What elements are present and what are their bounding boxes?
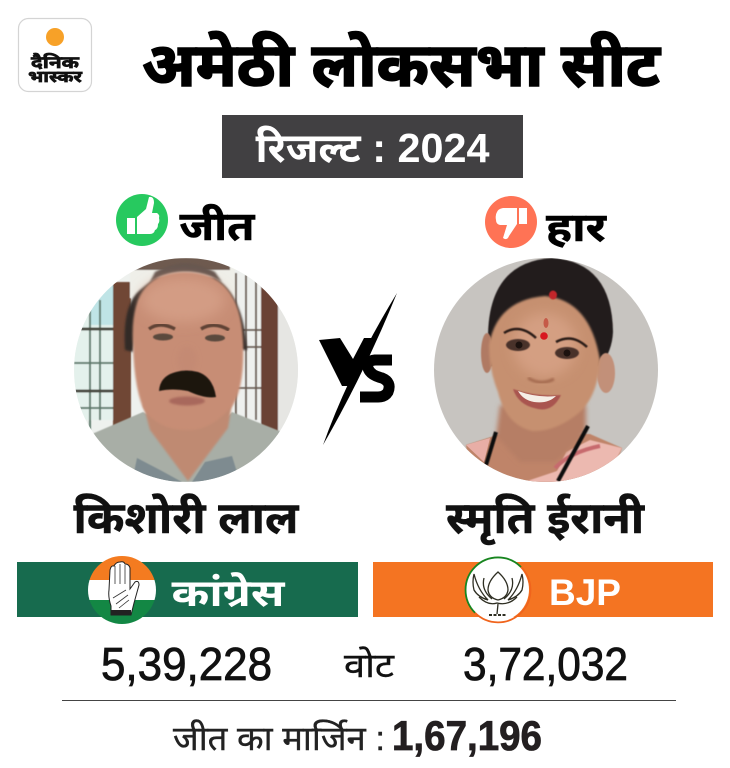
brows and eyes	[149, 325, 229, 330]
neck	[496, 405, 586, 462]
hair	[125, 278, 247, 352]
shirt	[88, 412, 292, 482]
loss label	[485, 196, 608, 250]
result badge	[222, 115, 523, 178]
ears	[481, 333, 493, 373]
hair	[488, 258, 613, 366]
text: congress: कांग्रेस	[172, 571, 286, 615]
face	[133, 272, 243, 430]
icon: versus mark	[319, 293, 397, 445]
candidate name: winner: किशोरी लाल	[74, 493, 300, 543]
party bar: congress	[17, 556, 358, 624]
text: margin value: 1,67,196	[392, 712, 542, 759]
nose shade	[528, 378, 554, 382]
margin	[173, 712, 542, 759]
icon: BJP lotus	[465, 557, 530, 622]
votes: loser: 3,72,032	[463, 638, 628, 690]
icon: congress hand	[88, 556, 156, 624]
text: win: जीत	[180, 204, 256, 249]
eyes	[506, 339, 530, 351]
votes: winner: 5,39,228	[101, 638, 272, 690]
brows	[504, 329, 587, 347]
photo: winning candidate	[74, 258, 300, 482]
neck	[143, 404, 232, 481]
divider	[62, 700, 676, 701]
icon: thumbs down	[485, 196, 537, 248]
result badge: रिजल्ट : 2024	[256, 125, 490, 171]
sindoor and bindi	[540, 332, 548, 340]
text: loss: हार	[546, 206, 608, 250]
text: BJP: BJP	[549, 572, 621, 613]
logo: Dainik Bhaskar	[18, 18, 92, 92]
win label	[116, 194, 256, 249]
mouth	[513, 389, 561, 409]
face	[489, 296, 600, 431]
necklace	[486, 426, 588, 481]
photo: losing candidate	[434, 258, 658, 482]
moustache	[159, 370, 216, 397]
logo: Dainik Bhaskar: दैनिक	[31, 51, 80, 72]
text: margin label: जीत का मार्जिन :	[173, 719, 385, 758]
party bar: BJP	[373, 557, 713, 622]
icon: thumbs up	[116, 194, 168, 246]
chest and sari	[466, 434, 622, 482]
logo: Dainik Bhaskar: भास्कर	[28, 69, 83, 86]
title: अमेठी लोकसभा सीट	[142, 31, 661, 99]
candidate name: loser: स्मृति ईरानी	[446, 493, 645, 545]
votes label: वोट	[344, 647, 395, 685]
